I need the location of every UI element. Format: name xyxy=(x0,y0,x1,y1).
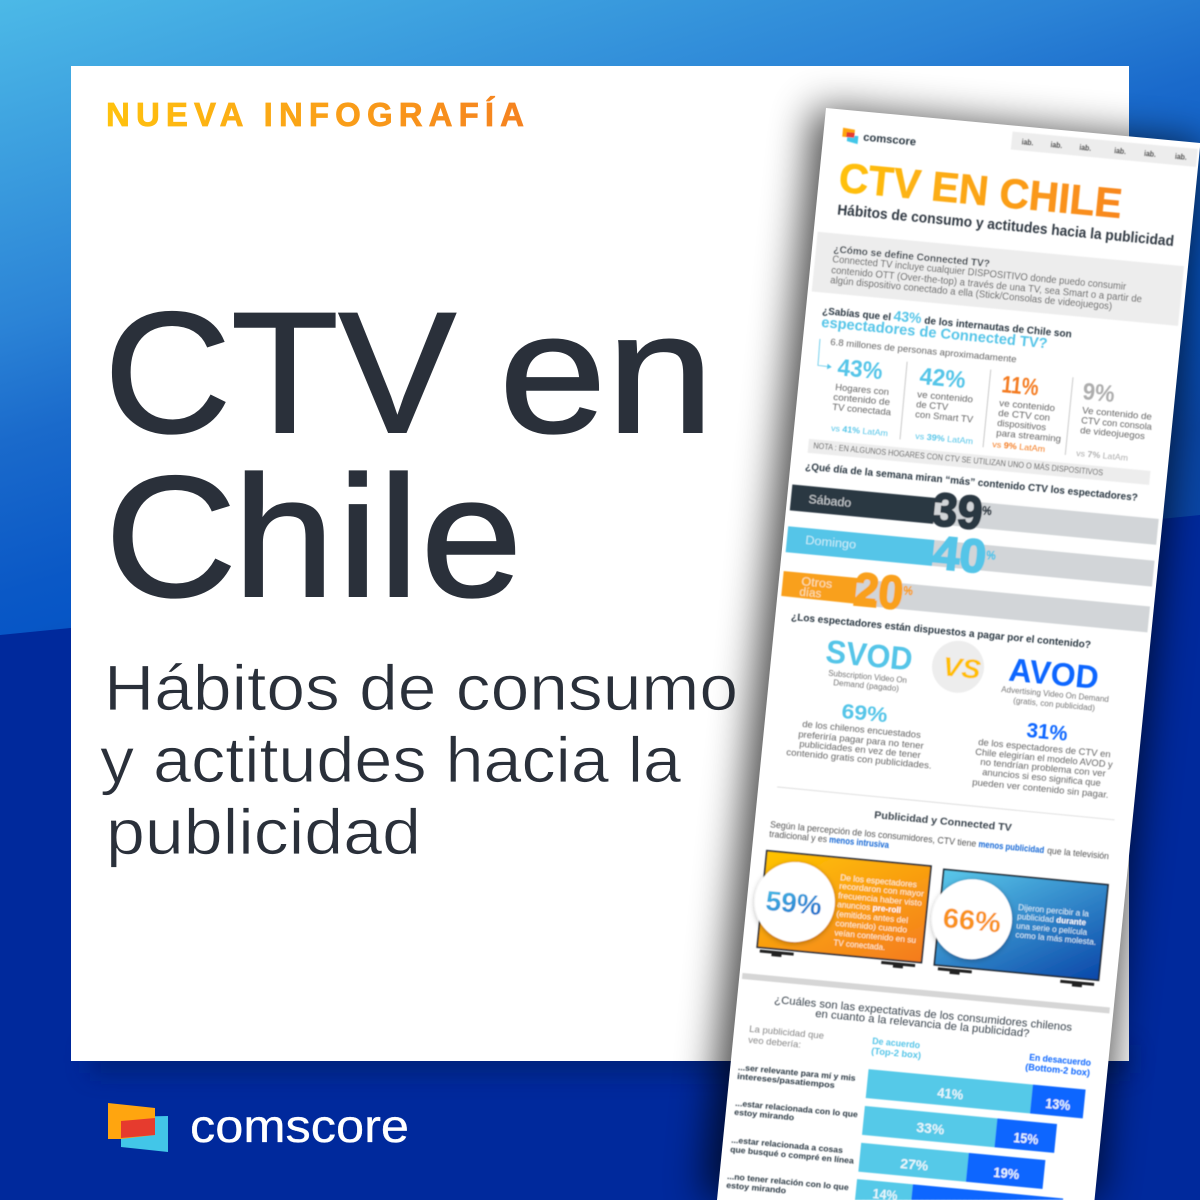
row: relevante: ...ser relevante para mí y mis xyxy=(738,1062,856,1083)
partner logos strip: iab. xyxy=(1144,149,1156,159)
partner logos strip: iab. xyxy=(1174,152,1187,162)
panel: TV 66%: publicidad durante xyxy=(1017,912,1087,927)
stat: 9%: Ve contenido de xyxy=(1082,405,1152,423)
panel: TV 59%: veían contenido en su xyxy=(834,928,917,945)
note: NOTA : EN ALGUNOS HOGARES CON CTV SE UTILIZAN UNO O MÁS DISPOSITIVOS xyxy=(813,441,1103,477)
stat: 11% xyxy=(992,371,1067,455)
panel: TV 59%: contenido) cuando xyxy=(835,919,908,935)
panel: TV 66%: como la más molesta. xyxy=(1015,930,1097,947)
doc title: CTV EN CHILE xyxy=(837,154,1124,227)
stat: 42% xyxy=(913,363,980,446)
eyebrow heading: NUEVA INFOGRAFÍA xyxy=(106,96,524,133)
panel: AVOD: Advertising Video On Demand xyxy=(1001,685,1109,704)
legend: De acuerdo xyxy=(872,1036,921,1050)
row: cosas buscadas: que busqué o compré en línea xyxy=(730,1144,855,1166)
partner logos strip: iab. xyxy=(1079,143,1092,153)
panel: definition: Connected TV incluye cualquier DISPOSITIVO donde puedo consumir xyxy=(832,254,1127,293)
legend: (Top-2 box) xyxy=(871,1046,922,1061)
panel: TV 59%: TV conectada. xyxy=(833,938,886,952)
legend xyxy=(748,1024,1092,1078)
subtitle: y actitudes hacia la xyxy=(100,724,681,796)
main title: Chile xyxy=(105,441,522,633)
panel: AVOD: no tendrían problema con ver xyxy=(980,757,1106,780)
stat: 43%: vs 41% LatAm xyxy=(831,423,888,438)
panel: TV 66%: 66% xyxy=(941,902,1002,938)
stat: 43% xyxy=(830,354,897,438)
row: cosas buscadas: ...estar relacionada a cosas xyxy=(731,1135,844,1155)
heading: advertising and CTV: Publicidad y Connected TV xyxy=(874,810,1012,834)
heading: 43% question xyxy=(819,301,1073,369)
panel: AVOD xyxy=(972,649,1123,801)
row: relevante: 13% xyxy=(1045,1095,1072,1113)
panel shadow xyxy=(90,1045,1130,1073)
doc subtitle: Hábitos de consumo y actitudes hacia la publicidad xyxy=(837,203,1175,250)
wordmark: comscore xyxy=(190,1100,409,1152)
subtitle xyxy=(100,652,738,868)
stat: 9% xyxy=(1076,378,1157,465)
legend: En desacuerdo xyxy=(1029,1052,1092,1068)
panel: TV 59%: De los espectadores xyxy=(840,873,917,889)
heading: advertising and CTV: que la televisión xyxy=(1047,845,1109,861)
subtitle: Hábitos de consumo xyxy=(104,652,738,724)
panel: AVOD: Chile elegirían el modelo AVOD y xyxy=(975,747,1113,771)
stat: 42%: 42% xyxy=(918,363,967,394)
bar: Otros días 20%: Otros xyxy=(801,574,833,591)
stat: 11%: para streaming xyxy=(996,428,1062,445)
stat: 43%: Hogares con xyxy=(835,382,890,398)
partner logos strip: iab. xyxy=(1021,137,1034,148)
row: relacionada: 15% xyxy=(1013,1129,1040,1147)
heading: 43% question: de los internautas de Chile son xyxy=(924,316,1072,340)
doc shadow xyxy=(703,108,1200,1200)
stat: 42%: vs 39% LatAm xyxy=(915,431,974,446)
stat: 9%: 9% xyxy=(1081,378,1116,408)
row: relacionada xyxy=(733,1094,1057,1153)
row: sin relación xyxy=(726,1167,1063,1200)
stat: 42%: ve contenido xyxy=(917,389,974,405)
panel: TV 66%: Dijeron percibir a la xyxy=(1018,903,1090,919)
stat: 11%: ve contenido xyxy=(999,398,1056,414)
row: sin relación: ...no tener relación con lo que xyxy=(727,1171,849,1192)
partner logos strip xyxy=(1011,132,1198,167)
legend: veo debería: xyxy=(748,1035,802,1050)
stat: 11%: 11% xyxy=(1000,371,1040,402)
row: cosas buscadas xyxy=(729,1131,1045,1189)
bar: Domingo 40%: 40 xyxy=(931,526,989,583)
bar: Sábado 39% xyxy=(789,470,1160,556)
panel: SVOD: preferiría pagar para no tener xyxy=(798,729,924,752)
partner logos strip: iab. xyxy=(1050,140,1063,150)
heading: advertising and CTV: tradicional y es xyxy=(769,829,828,844)
row: cosas buscadas: 19% xyxy=(993,1164,1021,1182)
icon: TV stands xyxy=(937,967,1094,988)
bar: Otros días 20%: días xyxy=(799,585,822,601)
stat: 43%: TV conectada xyxy=(832,402,892,418)
bar: Domingo 40%: Domingo xyxy=(805,533,857,552)
bar: Domingo 40%: % xyxy=(986,548,997,563)
panel: definition: ¿Cómo se define Connected TV? xyxy=(833,244,990,270)
panel: AVOD: anuncios si eso significa que xyxy=(982,767,1101,789)
stat: 9%: vs 7% LatAm xyxy=(1076,448,1129,463)
panel: TV 59% xyxy=(749,850,931,970)
row: relacionada: estoy mirando xyxy=(734,1107,795,1122)
panel: TV 59%: (emitidos antes del xyxy=(836,909,909,925)
heading: advertising and CTV: menos publicidad xyxy=(978,839,1045,855)
legend: (Bottom-2 box) xyxy=(1025,1062,1090,1078)
legend: La publicidad que xyxy=(749,1024,824,1041)
panel: SVOD: SVOD xyxy=(824,633,914,677)
icon: VS badge: VS xyxy=(941,651,982,685)
panel: AVOD: de los espectadores de CTV en xyxy=(978,737,1111,760)
doc sheet xyxy=(717,108,1200,1200)
row: relevante: 41% xyxy=(937,1084,965,1102)
doc header logo xyxy=(842,128,917,150)
stat: 43%: contenido de xyxy=(833,392,891,408)
rotated infographic preview xyxy=(721,114,1198,1200)
row: sin relación: estoy mirando xyxy=(726,1180,787,1196)
panel: AVOD: 31% xyxy=(1026,719,1069,746)
row: relacionada: ...estar relacionada con lo que xyxy=(735,1098,859,1119)
heading: day of week: ¿Qué día de la semana miran “más” contenido CTV los espectadores? xyxy=(805,462,1138,504)
stat: 43%: 43% xyxy=(836,354,884,385)
panel: TV 66% xyxy=(926,869,1108,989)
stat: 11%: de CTV con xyxy=(998,408,1051,424)
white panel xyxy=(71,66,1129,1061)
panel: SVOD: publicidades en vez de tener xyxy=(799,739,921,761)
row: cosas buscadas: 27% xyxy=(900,1155,930,1174)
panel: definition xyxy=(812,232,1184,326)
panel: TV 66%: una serie o película xyxy=(1016,921,1088,937)
stat: 9%: de videojuegos xyxy=(1080,425,1146,442)
panel: definition: contenido OTT (Over-the-top) a través de una TV, sea Smart o a partir de xyxy=(831,265,1143,305)
stat: 42%: con Smart TV xyxy=(915,409,974,426)
heading: relevance expectations: ¿Cuáles son las expectativas de los consumidores chilenos xyxy=(774,994,1073,1034)
stat: 42%: de CTV xyxy=(916,399,949,413)
panel: SVOD: de los chilenos encuestados xyxy=(802,719,922,741)
heading: pay question: ¿Los espectadores están dispuestos a pagar por el contenido? xyxy=(791,612,1091,651)
panel: AVOD: (gratis, con publicidad) xyxy=(1013,696,1096,713)
bar: Sábado 39%: Sábado xyxy=(808,492,852,510)
panel: AVOD: AVOD xyxy=(1007,652,1100,696)
panel: SVOD: Subscription Video On xyxy=(828,669,907,685)
bar: Otros días 20%: % xyxy=(903,583,914,598)
main title: en xyxy=(499,277,714,469)
subtitle: publicidad xyxy=(106,796,421,868)
panel: TV 59%: frecuencia haber visto xyxy=(838,891,923,908)
main title: CTV xyxy=(104,277,456,469)
stat: 11%: vs 9% LatAm xyxy=(992,439,1046,454)
panel: AVOD: pueden ver contenido sin pagar. xyxy=(972,777,1109,801)
doc header logo: comscore xyxy=(863,132,917,149)
row: relevante xyxy=(736,1057,1086,1118)
stat: 9%: CTV con consola xyxy=(1081,415,1153,433)
panel: SVOD: 69% xyxy=(840,700,889,727)
heading: 43% question: 43% xyxy=(893,308,922,327)
icon: comscore mark xyxy=(108,1103,168,1152)
bar: Sábado 39%: % xyxy=(982,503,993,518)
heading: 43% question: 6.8 millones de personas aproximadamente xyxy=(830,337,1017,364)
heading: 43% question: espectadores de Connected TV? xyxy=(821,315,1048,352)
panel: TV 59%: recordaron con mayor xyxy=(839,881,925,898)
bar: Sábado 39%: 39 xyxy=(930,483,985,539)
partner logos strip: iab. xyxy=(1114,146,1127,156)
panel: definition: algún dispositivo conectado a ella (Stick/Consolas de videojuegos) xyxy=(830,275,1113,313)
main title xyxy=(104,277,714,633)
stat: 11%: dispositivos xyxy=(997,418,1047,433)
heading: 43% question: ¿Sabías que el xyxy=(822,306,892,323)
panel: SVOD xyxy=(786,631,944,772)
row: relevante: intereses/pasatiempos xyxy=(737,1071,836,1090)
bar: Domingo 40% xyxy=(784,512,1156,599)
panel: SVOD: Demand (pagado) xyxy=(833,678,900,693)
brand logo xyxy=(108,1100,409,1152)
panel: TV 59%: 59% xyxy=(764,885,823,921)
row: relacionada: 33% xyxy=(916,1119,946,1138)
heading: advertising and CTV: Según la percepción de los consumidores, CTV tiene xyxy=(770,819,977,849)
panel: TV 59%: anuncios pre-roll xyxy=(837,900,901,915)
icon: elbow arrow xyxy=(817,339,834,369)
icon: TV stands xyxy=(759,949,915,970)
bar: Otros días 20%: 20 xyxy=(852,563,906,619)
heading: relevance expectations: en cuanto a la relevancia de la publicidad? xyxy=(815,1008,1030,1040)
panel: SVOD: contenido gratis con publicidades. xyxy=(786,747,932,772)
icon: VS badge xyxy=(930,638,987,695)
heading: advertising and CTV xyxy=(769,800,1111,871)
bar: Otros días 20% xyxy=(780,556,1152,642)
heading: advertising and CTV: menos intrusiva xyxy=(829,834,890,850)
